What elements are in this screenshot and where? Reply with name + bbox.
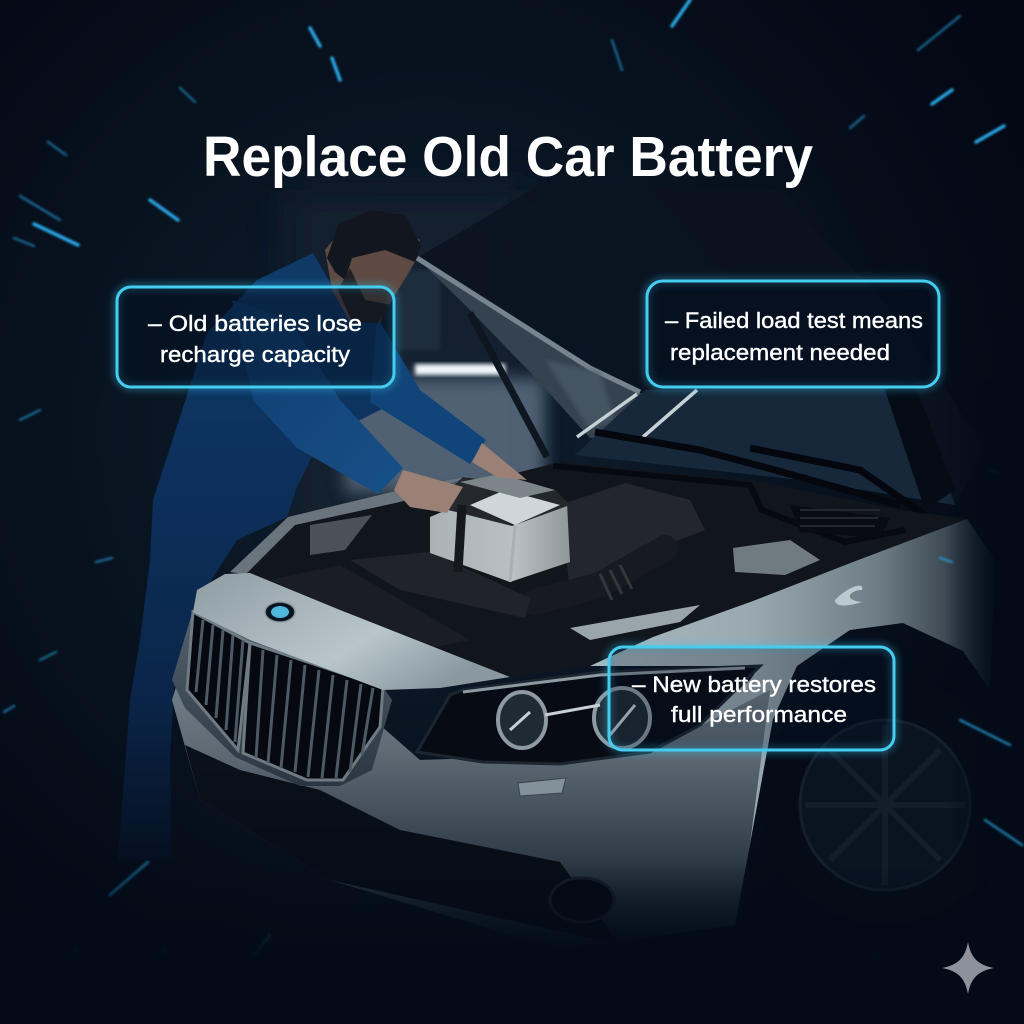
hood front panel: [193, 573, 510, 690]
dark fades: [0, 380, 1024, 1024]
callout: failed load test: [647, 281, 939, 387]
body and legs: [118, 253, 400, 860]
windshield and wipers: [575, 380, 955, 515]
callout: new battery: full performance: [671, 702, 847, 727]
fender: [590, 519, 995, 920]
lower intake: [185, 745, 620, 945]
washer cap: [518, 778, 566, 796]
hair: [327, 210, 421, 280]
fender highlight: [835, 586, 862, 606]
neck and head: [325, 215, 420, 322]
engine bay: [245, 462, 967, 677]
far arm: [370, 317, 486, 464]
right engine parts: [733, 540, 820, 575]
air intake: [535, 548, 665, 602]
rubber seal: [553, 466, 905, 542]
kidney grille: [187, 612, 383, 780]
open hood: [417, 185, 985, 505]
vent: [790, 505, 890, 538]
callout: old batteries: – Old batteries lose: [148, 311, 362, 336]
garage window glow: [290, 190, 545, 530]
callout: new battery: – New battery restores: [632, 672, 876, 697]
front bumper: [172, 640, 770, 950]
callout: new battery: [609, 647, 894, 750]
hood strut: [470, 313, 547, 457]
engine cover: [560, 483, 705, 590]
callout: failed load test: replacement needed: [670, 340, 890, 365]
grille surround: [172, 610, 392, 786]
icon: sparkle: [942, 942, 994, 994]
fog lamp: [550, 878, 614, 922]
headlight: [417, 666, 760, 764]
BMW badge: [265, 602, 295, 622]
left engine parts: [310, 515, 372, 555]
streaks over car: [940, 558, 1022, 845]
callout: failed load test: – Failed load test means: [665, 308, 923, 333]
man in blue coveralls: [118, 210, 486, 860]
battery: [430, 474, 570, 582]
callout: old batteries: [117, 287, 394, 387]
front wheel: [760, 675, 1010, 925]
near arm: [232, 300, 403, 494]
callout: old batteries: recharge capacity: [160, 342, 351, 367]
hands: [394, 443, 527, 513]
title: Replace Old Car Battery: [203, 125, 813, 189]
beard: [338, 268, 392, 323]
car bay trim: [230, 476, 470, 575]
